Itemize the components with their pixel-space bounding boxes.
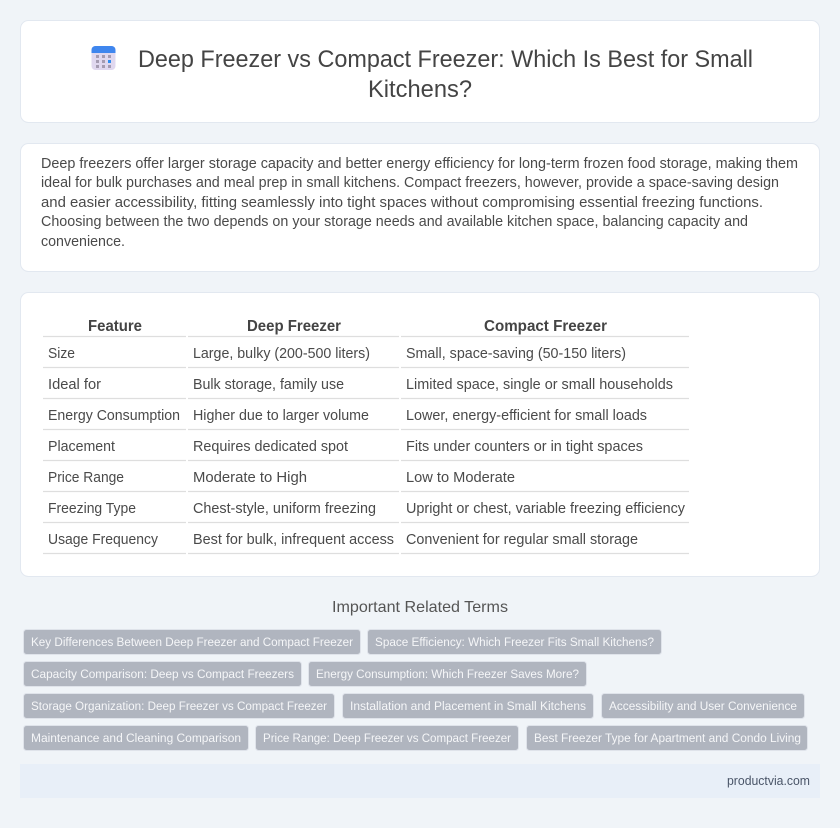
table row: ideal for: Ideal for bbox=[48, 377, 101, 393]
icon: calendar grid bbox=[92, 46, 116, 70]
table row: energy consumption: Energy Consumption bbox=[48, 408, 180, 424]
title bbox=[138, 46, 753, 103]
related term tags: Capacity Comparison: Deep vs Compact Freezers bbox=[31, 667, 294, 681]
table row: ideal for bbox=[48, 377, 673, 393]
footer bbox=[20, 764, 820, 798]
table row: energy consumption: Higher due to larger volume bbox=[193, 408, 369, 424]
table row: size: Large, bulky (200-500 liters) bbox=[193, 346, 370, 362]
related term tags: Key Differences Between Deep Freezer and Compact Freezer bbox=[31, 635, 353, 649]
title: Deep Freezer vs Compact Freezer: Which Is Best for Small bbox=[138, 46, 753, 73]
related term tags: Storage Organization: Deep Freezer vs Compact Freezer bbox=[31, 699, 327, 713]
text block: summary paragraph: convenience. bbox=[41, 234, 125, 250]
table row: size: Small, space-saving (50-150 liters) bbox=[406, 346, 626, 362]
table row: freezing type: Freezing Type bbox=[48, 501, 136, 517]
table row: freezing type bbox=[48, 501, 686, 517]
table row: price range: Price Range bbox=[48, 470, 124, 486]
panel: header bbox=[20, 20, 820, 122]
table row: freezing type: Upright or chest, variable freezing efficiency bbox=[406, 501, 686, 517]
footer: productvia.com bbox=[727, 774, 810, 788]
table header: Compact Freezer bbox=[484, 318, 607, 335]
table row: usage frequency bbox=[48, 532, 638, 548]
related term tags: Accessibility and User Convenience bbox=[609, 699, 797, 713]
table row: ideal for: Bulk storage, family use bbox=[193, 377, 344, 393]
table row: placement: Placement bbox=[48, 439, 115, 455]
text block: summary paragraph: Choosing between the two depends on your storage needs and available kitchen space, balancing capacity and bbox=[41, 214, 748, 230]
table header bbox=[88, 318, 607, 335]
table header: Deep Freezer bbox=[247, 318, 341, 335]
table row: price range: Moderate to High bbox=[193, 470, 307, 486]
related term tags: Installation and Placement in Small Kitchens bbox=[350, 699, 586, 713]
table row: usage frequency: Convenient for regular small storage bbox=[406, 532, 638, 548]
text block: summary paragraph: ideal for bulk purchases and meal prep in small kitchens. Compact freezers, however, provide a space-saving design bbox=[41, 175, 779, 191]
table row: energy consumption: Lower, energy-efficient for small loads bbox=[406, 408, 647, 424]
related term tags bbox=[24, 630, 808, 750]
panel: summary bbox=[20, 144, 820, 272]
table row: size bbox=[48, 346, 626, 362]
related term tags: Energy Consumption: Which Freezer Saves More? bbox=[316, 667, 579, 681]
table row: usage frequency: Usage Frequency bbox=[48, 532, 159, 548]
table row: price range: Low to Moderate bbox=[406, 470, 515, 486]
table row: placement bbox=[48, 439, 643, 455]
table row: placement: Requires dedicated spot bbox=[193, 439, 348, 455]
text block: summary paragraph bbox=[41, 156, 798, 250]
title: Kitchens? bbox=[368, 76, 472, 103]
text block: summary paragraph: and easier accessibility, fitting seamlessly into tight spaces without compromising essential freezing functions. bbox=[41, 195, 763, 211]
table row: ideal for: Limited space, single or small households bbox=[406, 377, 673, 393]
table row: size: Size bbox=[48, 346, 75, 362]
heading: important related terms: Important Related Terms bbox=[332, 599, 508, 616]
table row: usage frequency: Best for bulk, infrequent access bbox=[193, 532, 394, 548]
table row: placement: Fits under counters or in tight spaces bbox=[406, 439, 643, 455]
related term tags: Maintenance and Cleaning Comparison bbox=[31, 731, 241, 745]
text block: summary paragraph: Deep freezers offer larger storage capacity and better energy efficiency for long-term frozen food storage, making them bbox=[41, 156, 798, 172]
table header: Feature bbox=[88, 318, 142, 335]
table row: price range bbox=[48, 470, 515, 486]
table row: freezing type: Chest-style, uniform freezing bbox=[193, 501, 376, 517]
table row: energy consumption bbox=[48, 408, 647, 424]
related term tags: Best Freezer Type for Apartment and Condo Living bbox=[534, 731, 801, 745]
related term tags: Price Range: Deep Freezer vs Compact Freezer bbox=[263, 731, 511, 745]
panel: comparison table bbox=[20, 292, 820, 576]
related term tags: Space Efficiency: Which Freezer Fits Small Kitchens? bbox=[375, 635, 654, 649]
